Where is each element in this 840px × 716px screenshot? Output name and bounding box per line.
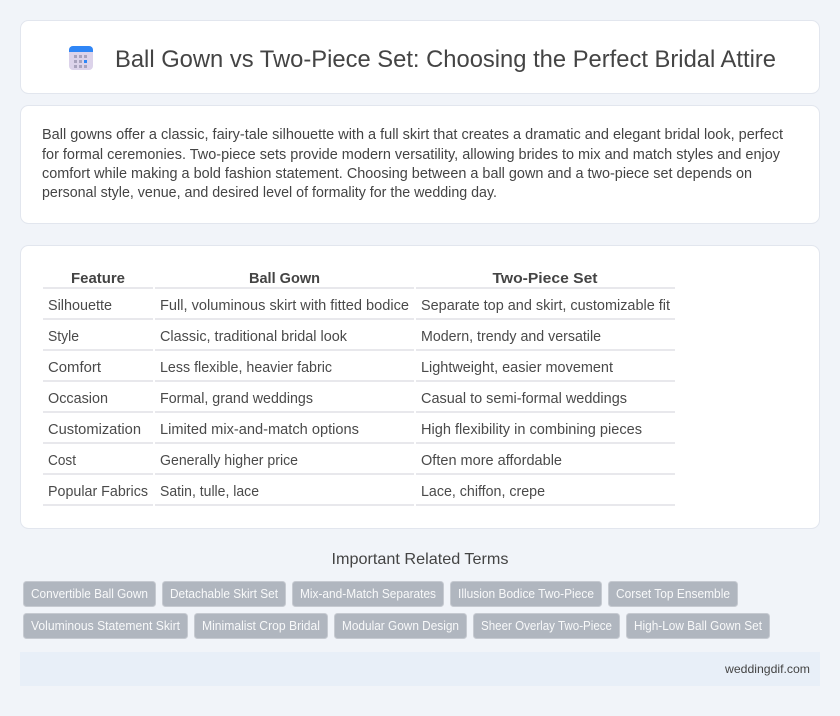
tag	[626, 614, 770, 638]
row: style: Modern, trendy and versatile	[421, 329, 601, 345]
row: customization: Customization	[48, 422, 141, 438]
panel: introduction	[20, 106, 820, 224]
row: comfort: Lightweight, easier movement	[421, 360, 613, 376]
row: popular fabrics: Popular Fabrics	[48, 484, 148, 500]
source: weddingdif.com	[724, 662, 810, 676]
panel: related term tags	[24, 582, 770, 638]
row: style: Style	[48, 329, 79, 345]
tag: Voluminous Statement Skirt	[31, 619, 181, 633]
row: occasion	[43, 391, 675, 412]
title: Ball Gown vs Two-Piece Set: Choosing the Perfect Bridal Attire	[115, 46, 776, 73]
row: cost: Cost	[48, 453, 76, 469]
tag: Corset Top Ensemble	[616, 587, 730, 601]
tag	[292, 582, 444, 606]
row: popular fabrics	[43, 484, 675, 505]
tag	[24, 614, 188, 638]
row: silhouette: Silhouette	[48, 298, 112, 314]
intro text: comfort while making a bold fashion statement. Choosing between a ball gown and a two-piece set depends on	[42, 166, 752, 182]
row: occasion: Formal, grand weddings	[160, 391, 313, 407]
tag	[194, 614, 328, 638]
row: style	[43, 329, 675, 350]
tag: Sheer Overlay Two-Piece	[481, 619, 612, 633]
tag	[474, 614, 620, 638]
panel: header	[20, 20, 820, 94]
row: cost: Often more affordable	[421, 453, 562, 469]
tag: Illusion Bodice Two-Piece	[458, 587, 594, 601]
table header: Feature	[71, 270, 125, 287]
tag: Detachable Skirt Set	[170, 587, 278, 601]
row: silhouette: Full, voluminous skirt with fitted bodice	[160, 298, 409, 314]
tag: Mix-and-Match Separates	[300, 587, 436, 601]
intro text: for formal ceremonies. Two-piece sets provide modern versatility, allowing brides to mix and match styles and enjoy	[42, 147, 781, 163]
footer	[20, 652, 820, 686]
icon: calendar	[69, 46, 93, 70]
row: customization: Limited mix-and-match options	[160, 422, 359, 438]
tag: Minimalist Crop Bridal	[202, 619, 320, 633]
panel: comparison table	[20, 246, 820, 528]
row: customization: High flexibility in combining pieces	[421, 422, 642, 438]
heading: related terms: Important Related Terms	[332, 551, 508, 568]
row: comfort: Comfort	[48, 360, 101, 376]
intro text: Ball gowns offer a classic, fairy-tale silhouette with a full skirt that creates a dramatic and elegant bridal look, perfect	[42, 127, 783, 143]
tag	[162, 582, 286, 606]
row: cost	[43, 453, 675, 474]
row: occasion: Occasion	[48, 391, 108, 407]
row: cost: Generally higher price	[160, 453, 298, 469]
tag: Convertible Ball Gown	[31, 587, 148, 601]
intro text	[42, 127, 783, 201]
row: popular fabrics: Satin, tulle, lace	[160, 484, 259, 500]
tag: Modular Gown Design	[342, 619, 459, 633]
row: occasion: Casual to semi-formal weddings	[421, 391, 627, 407]
tag	[608, 582, 738, 606]
row: comfort: Less flexible, heavier fabric	[160, 360, 332, 376]
tag	[24, 582, 156, 606]
table header: Two-Piece Set	[492, 270, 598, 287]
tag: High-Low Ball Gown Set	[634, 619, 762, 633]
table header: Ball Gown	[249, 270, 320, 287]
table header	[43, 270, 675, 288]
row: silhouette: Separate top and skirt, customizable fit	[421, 298, 670, 314]
row: popular fabrics: Lace, chiffon, crepe	[421, 484, 545, 500]
tag	[334, 614, 466, 638]
row: silhouette	[43, 298, 675, 319]
tag	[450, 582, 602, 606]
row: style: Classic, traditional bridal look	[160, 329, 348, 345]
intro text: personal style, venue, and desired level of formality for the wedding day.	[42, 185, 497, 201]
row: comfort	[43, 360, 675, 381]
row: customization	[43, 422, 675, 443]
